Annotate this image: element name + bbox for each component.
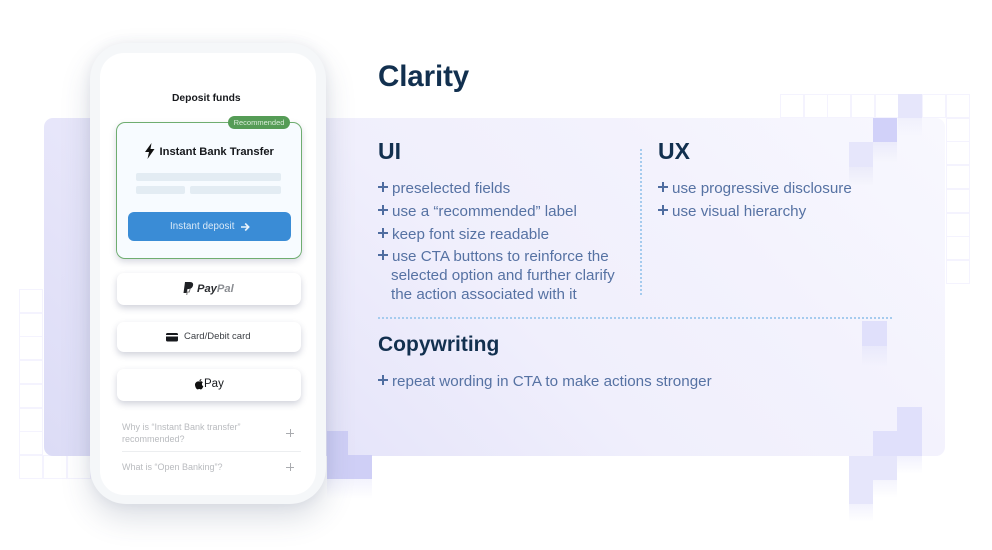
grid decoration: left bbox=[19, 289, 91, 479]
list: UI items: the action associated with it bbox=[391, 286, 577, 303]
decorative blocks top right bbox=[849, 94, 922, 172]
badge: recommended bbox=[228, 116, 290, 129]
list: UX items bbox=[658, 180, 852, 220]
list: UX items: use visual hierarchy bbox=[672, 203, 806, 220]
card: instant bank transfer bbox=[116, 122, 302, 259]
decorative blocks below the panel bbox=[327, 431, 372, 486]
button: Apple Pay bbox=[117, 369, 301, 400]
list: UI items bbox=[378, 180, 615, 303]
heading: UX: UX bbox=[658, 138, 690, 164]
button: card/debit card bbox=[117, 322, 301, 352]
icon: card bbox=[166, 333, 178, 342]
section: UX bbox=[658, 138, 852, 220]
phone screen bbox=[100, 53, 316, 495]
Pay label: Pay bbox=[204, 378, 224, 390]
PayPal wordmark: PayPal bbox=[197, 283, 234, 295]
badge: recommended: Recommended bbox=[234, 118, 284, 127]
title: Clarity bbox=[378, 60, 469, 93]
CTA button bbox=[128, 212, 290, 241]
icon: arrow bbox=[241, 222, 250, 232]
decorative stairs bottom right bbox=[849, 407, 922, 510]
heading: UI: UI bbox=[378, 138, 401, 164]
card label: Card/Debit card bbox=[184, 331, 251, 342]
list: UX items: use progressive disclosure bbox=[672, 180, 852, 197]
list: UI items: keep font size readable bbox=[392, 226, 549, 243]
button: PayPal bbox=[117, 273, 301, 304]
icon: PayPal mark bbox=[184, 282, 194, 295]
divider: horizontal dotted bbox=[378, 317, 894, 319]
list: UI items: use CTA buttons to reinforce the bbox=[392, 248, 609, 265]
icon: Apple logo bbox=[195, 379, 204, 390]
FAQ divider bbox=[122, 451, 301, 452]
FAQ item 1: Why is “Instant Bank transfer” bbox=[122, 422, 241, 432]
list: UI items: preselected fields bbox=[392, 180, 510, 197]
list: Copywriting item: repeat wording in CTA to make actions stronger bbox=[392, 373, 712, 390]
section: Copywriting bbox=[378, 333, 712, 390]
phone mockup bbox=[90, 43, 326, 504]
list: UI items: use a “recommended” label bbox=[392, 203, 577, 220]
form placeholder fields bbox=[136, 173, 281, 194]
grid decoration: top right bbox=[780, 94, 970, 284]
list: UI items: selected option and further clarify bbox=[391, 267, 615, 284]
CTA label: Instant deposit bbox=[170, 221, 235, 232]
section: UI bbox=[378, 138, 615, 303]
divider: vertical dotted bbox=[640, 149, 642, 297]
FAQ item 1 bbox=[122, 422, 294, 444]
heading: Copywriting: Copywriting bbox=[378, 333, 499, 356]
FAQ item 2: What is “Open Banking”? bbox=[122, 462, 223, 472]
decorative blocks right middle bbox=[862, 321, 887, 351]
icon: lightning bolt bbox=[145, 143, 154, 159]
panel: clarity background bbox=[44, 118, 945, 456]
card title: Instant Bank Transfer bbox=[160, 146, 274, 158]
FAQ item 1: recommended? bbox=[122, 434, 185, 444]
phone heading: Deposit funds bbox=[172, 93, 241, 104]
